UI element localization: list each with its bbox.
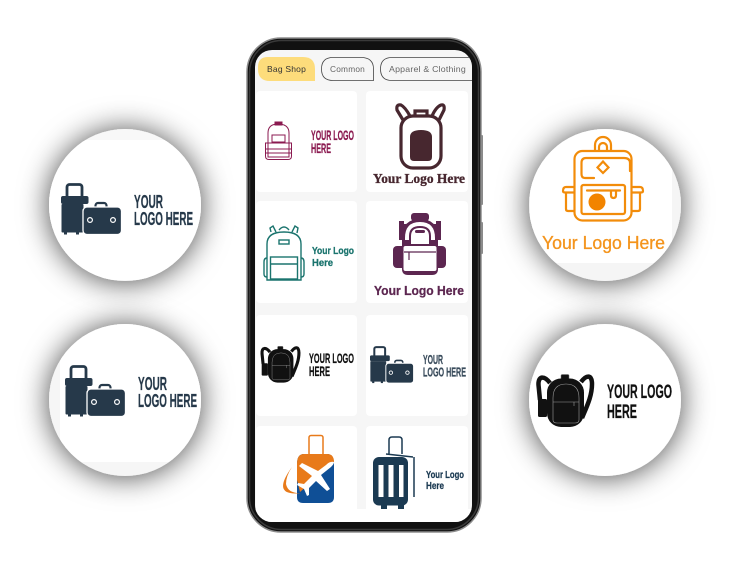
tab: Bag Shop: Bag Shop (267, 64, 306, 74)
logo text: Your Logo (426, 469, 464, 481)
icon: purple backpack (393, 213, 446, 275)
logo text: Here (426, 480, 444, 492)
bottom navigation strip (255, 509, 472, 522)
tab: Common (322, 58, 374, 80)
tab: Apparel & Clothing: Apparel & Clothing (389, 64, 466, 74)
logo text: YOUR (134, 192, 163, 212)
icon: plum backpack (397, 105, 444, 168)
card: luggage logo (366, 315, 468, 416)
tab: Common: Common (330, 64, 365, 74)
logo text: YOUR LOGO (309, 350, 354, 366)
logo text: HERE (607, 401, 637, 423)
card: plum backpack logo (366, 91, 468, 192)
callout circle: black backpack logo bottom right (529, 324, 681, 476)
icon: suitcase with plane (283, 436, 334, 503)
icon: maroon outline backpack (266, 122, 292, 160)
card: purple backpack logo (366, 201, 468, 303)
logo text: Your Logo (312, 245, 354, 257)
phone body (247, 38, 481, 532)
logo text: YOUR LOGO (311, 127, 354, 143)
icon: dark suitcase (373, 437, 414, 509)
logo text: HERE (311, 140, 331, 156)
logo text: LOGO HERE (134, 209, 193, 229)
card: black backpack logo (256, 315, 357, 416)
logo grid (256, 91, 468, 516)
side buttons (480, 135, 483, 254)
card: maroon backpack logo (256, 91, 357, 192)
tab: Bag Shop (258, 57, 315, 81)
icon: teal outline backpack (264, 226, 304, 280)
logo text (134, 192, 193, 229)
icon: orange backpack (563, 137, 643, 220)
card: orange and blue travel logo (256, 426, 357, 516)
logo text: Your Logo Here (374, 284, 464, 298)
logo text (138, 374, 197, 411)
icon: luggage (370, 347, 414, 383)
card: dark suitcase logo (366, 426, 468, 516)
logo text: LOGO HERE (423, 364, 466, 380)
logo text: YOUR (138, 374, 167, 394)
tab: Apparel & Clothing (380, 58, 480, 80)
logo text: LOGO HERE (138, 391, 197, 411)
phone screen (255, 50, 480, 522)
logo text (423, 354, 466, 377)
icon: luggage (61, 184, 122, 234)
icon: black backpack (262, 346, 299, 383)
logo text: Your Logo Here (542, 233, 665, 253)
phone mockup (247, 38, 483, 532)
callout circle: luggage logo top left (49, 129, 202, 281)
logo text (607, 381, 672, 423)
logo text (426, 470, 464, 490)
callout circle: luggage logo bottom left (49, 324, 202, 476)
icon: black backpack (538, 374, 592, 427)
callout circle: orange backpack logo top right (529, 129, 681, 281)
card: teal backpack logo (256, 201, 357, 303)
logo text: HERE (309, 363, 330, 379)
logo text: YOUR (423, 352, 443, 367)
logo text (312, 246, 354, 266)
logo text (311, 130, 354, 154)
logo text (309, 353, 354, 376)
logo text: Here (312, 257, 333, 269)
icon: luggage (65, 366, 126, 416)
logo text: Your Logo Here (373, 171, 465, 186)
logo text: YOUR LOGO (607, 381, 672, 403)
